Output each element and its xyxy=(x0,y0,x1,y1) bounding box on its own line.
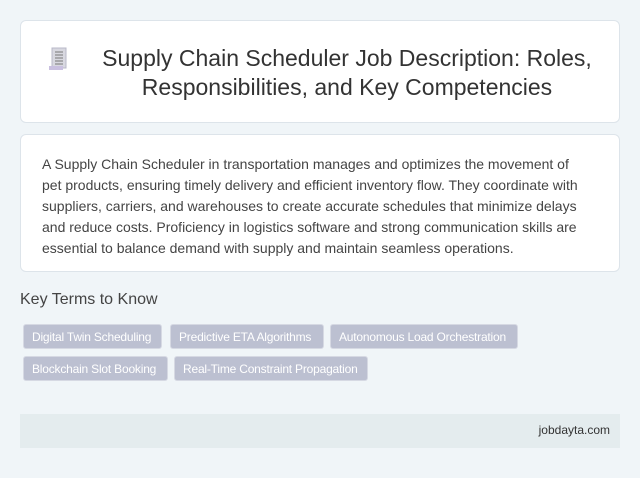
key term tags: Digital Twin Scheduling xyxy=(32,330,151,344)
footer xyxy=(20,414,620,448)
key term tags: Blockchain Slot Booking xyxy=(32,362,156,376)
key term tags: Real-Time Constraint Propagation xyxy=(183,362,358,376)
header card xyxy=(20,20,620,123)
key term tags: Predictive ETA Algorithms xyxy=(179,330,311,344)
description text: A Supply Chain Scheduler in transportation manages and optimizes the movement of pet products, ensuring timely delivery and efficient inventory flow. They coordinate with suppliers, carriers, and warehouses to create accurate schedules that minimize delays and reduce costs. Proficiency in logistics software and strong communication skills are essential to balance demand with supply and maintain seamless operations. xyxy=(42,156,578,256)
title: Supply Chain Scheduler Job Description: Roles, Responsibilities, and Key Competencies xyxy=(102,45,592,100)
footer text: jobdayta.com xyxy=(539,423,610,437)
key term tags: Autonomous Load Orchestration xyxy=(339,330,506,344)
icon: document xyxy=(49,48,66,70)
description card xyxy=(20,134,620,272)
key terms heading: Key Terms to Know xyxy=(20,291,158,308)
